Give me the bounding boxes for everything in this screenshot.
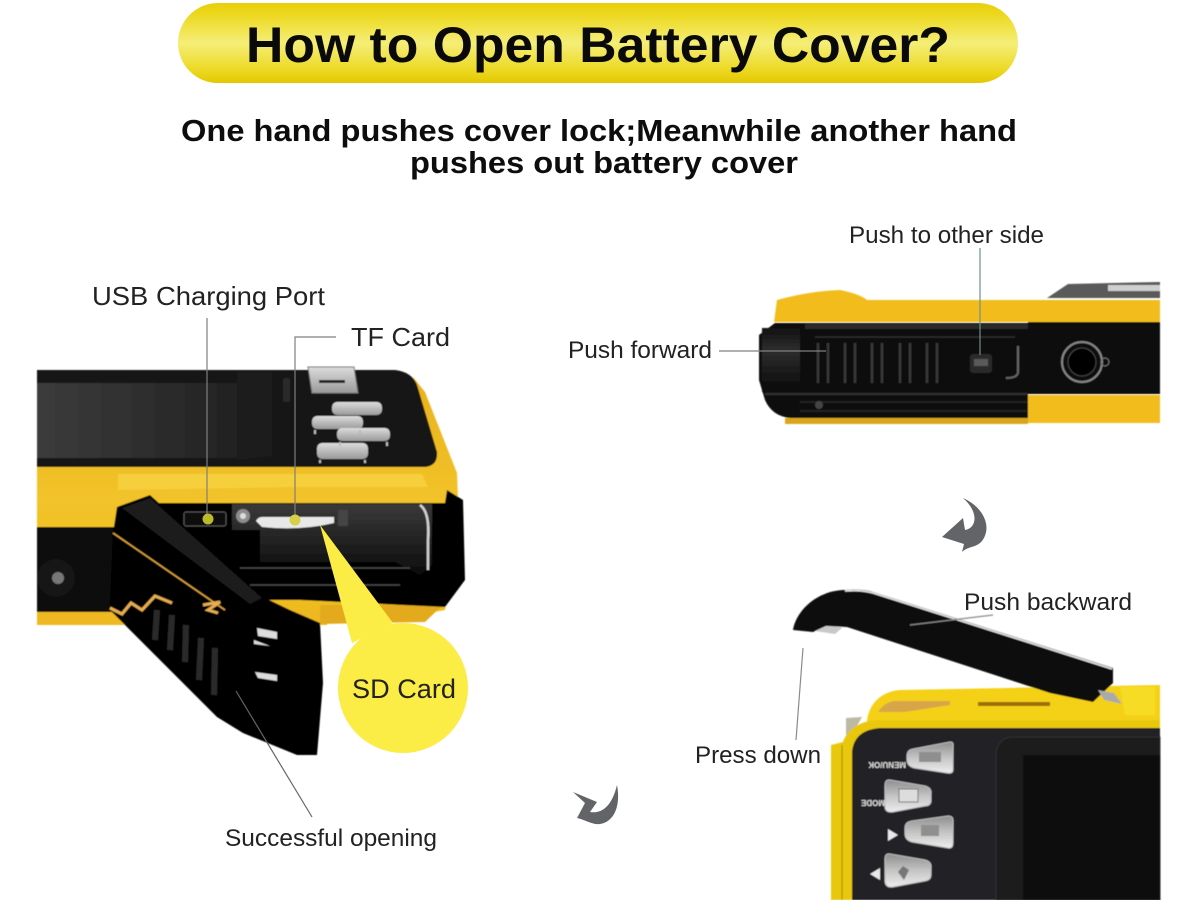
label: Push backward: Push backward bbox=[964, 589, 1132, 616]
button labels: MENU/OK bbox=[868, 760, 906, 769]
SD card slot bbox=[236, 509, 348, 528]
label: USB Charging Port: USB Charging Port bbox=[92, 281, 326, 311]
label: Successful opening: Successful opening bbox=[225, 825, 437, 852]
screen bbox=[1023, 755, 1160, 900]
label: Press down: Press down bbox=[695, 742, 821, 769]
USB port bbox=[184, 512, 226, 526]
lens ring bbox=[1047, 282, 1160, 298]
arrow: step 1 to step 2 bbox=[942, 498, 986, 552]
camera: top view with cover lock bbox=[759, 282, 1160, 424]
camera body yellow bbox=[37, 377, 458, 622]
label: USB Charging Port bbox=[92, 281, 326, 524]
camera buttons bbox=[308, 367, 390, 463]
button labels bbox=[860, 760, 906, 880]
yellow lower shell bbox=[1028, 395, 1160, 423]
front yellow frame bbox=[831, 720, 1160, 900]
side hinge bbox=[846, 717, 862, 735]
title banner: How to Open Battery Cover? bbox=[246, 17, 950, 73]
cover grille bbox=[155, 610, 215, 695]
title banner bbox=[178, 3, 1018, 83]
camera: left view with open cover bbox=[37, 367, 465, 755]
battery cover open bbox=[110, 495, 323, 755]
highlight on yellow band bbox=[118, 474, 428, 490]
callout: SD Card: SD Card bbox=[352, 674, 456, 704]
black right housing bbox=[1028, 322, 1160, 394]
cover highlights bbox=[254, 628, 277, 681]
label: TF Card bbox=[290, 322, 450, 526]
label: Push to other side: Push to other side bbox=[849, 222, 1044, 249]
rear buttons bbox=[885, 742, 953, 887]
rear yellow housing bbox=[867, 685, 1160, 725]
top yellow shell bbox=[774, 290, 1160, 322]
cover lock bbox=[970, 354, 992, 373]
arrow: step 2 to step 3 bbox=[573, 785, 618, 824]
callout: SD Card bbox=[320, 525, 468, 753]
label: Push forward: Push forward bbox=[568, 337, 712, 364]
battery compartment bbox=[150, 490, 465, 607]
camera back panel bbox=[37, 370, 437, 467]
sliding cover bbox=[759, 323, 1028, 418]
button labels: MODE bbox=[860, 798, 885, 807]
tripod socket bbox=[1062, 342, 1109, 382]
front black panel bbox=[852, 728, 1160, 900]
instruction subtitle: One hand pushes cover lock;Meanwhile another hand bbox=[181, 113, 1017, 148]
lower black front bbox=[37, 527, 127, 612]
label: Successful opening bbox=[225, 691, 437, 852]
instruction subtitle bbox=[181, 113, 1017, 180]
camera: rear view with lifted cover bbox=[793, 590, 1160, 900]
cover grille bbox=[818, 343, 937, 383]
cover lifted bbox=[793, 590, 1122, 704]
label: Press down bbox=[695, 648, 821, 769]
instruction subtitle: pushes out battery cover bbox=[410, 145, 798, 180]
screen bezel bbox=[996, 737, 1160, 900]
label: TF Card: TF Card bbox=[351, 322, 450, 352]
